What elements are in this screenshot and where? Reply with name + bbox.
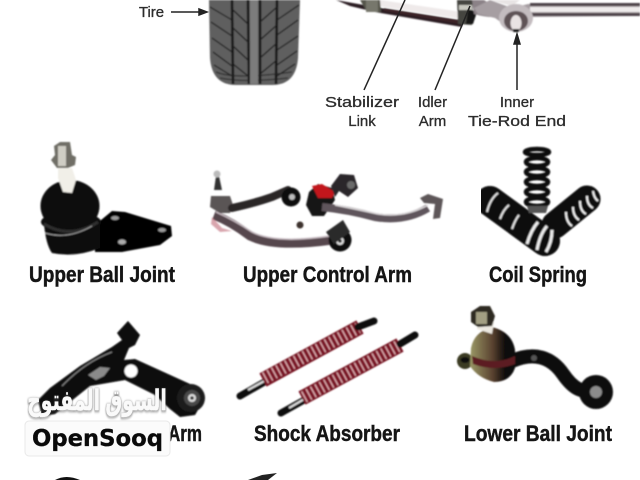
watermark: OpenSooq badge: OpenSooq: [32, 426, 163, 452]
icon: upper ball joint: [40, 142, 172, 255]
watermark: Arabic brand name: السوق المفتوح: [27, 385, 167, 417]
label: Inner Tie-Rod End: Inner: [500, 94, 534, 111]
icon: shock absorbers: [240, 321, 415, 413]
label: Lower Ball Joint: Lower Ball Joint: [464, 421, 613, 446]
watermark: OpenSooq badge: [25, 421, 170, 456]
icon: steering linkage: [336, 0, 640, 32]
icon: lower control arm: [38, 321, 205, 417]
icon: lower ball joint: [457, 306, 613, 409]
label: Stabilizer Link: [325, 94, 399, 130]
label: Lower Control Arm (partly hidden): Arm: [168, 421, 202, 446]
arrow: inner tie-rod end leader: [514, 34, 520, 90]
icon: coil spring: [487, 149, 598, 252]
icon: cropped part bottom left: [55, 477, 80, 480]
label: Inner Tie-Rod End: Tie-Rod End: [468, 113, 566, 130]
icon: upper control arm: [210, 170, 443, 252]
icon: tire: [209, 0, 300, 85]
label: Stabilizer Link: Stabilizer: [325, 94, 399, 111]
label: Inner Tie-Rod End: [468, 94, 566, 130]
label: Coil Spring: Coil Spring: [489, 262, 587, 287]
icon: cropped part bottom centre: [248, 473, 277, 480]
arrow: stabilizer link leader: [364, 0, 405, 90]
label: Idler Arm: Idler: [418, 94, 447, 111]
watermark: Arabic brand name: السوق المفتوح: [27, 386, 167, 418]
arrow: tire pointer: [171, 9, 207, 15]
label: Shock Absorber: Shock Absorber: [254, 421, 400, 446]
label: Idler Arm: Arm: [419, 113, 446, 130]
label: Idler Arm: [418, 94, 447, 130]
label: Tire: Tire: [139, 4, 164, 21]
label: Upper Ball Joint: Upper Ball Joint: [29, 262, 176, 287]
arrow: idler arm leader: [435, 6, 470, 90]
label: Upper Control Arm: Upper Control Arm: [243, 262, 412, 287]
label: Stabilizer Link: Link: [348, 113, 376, 130]
